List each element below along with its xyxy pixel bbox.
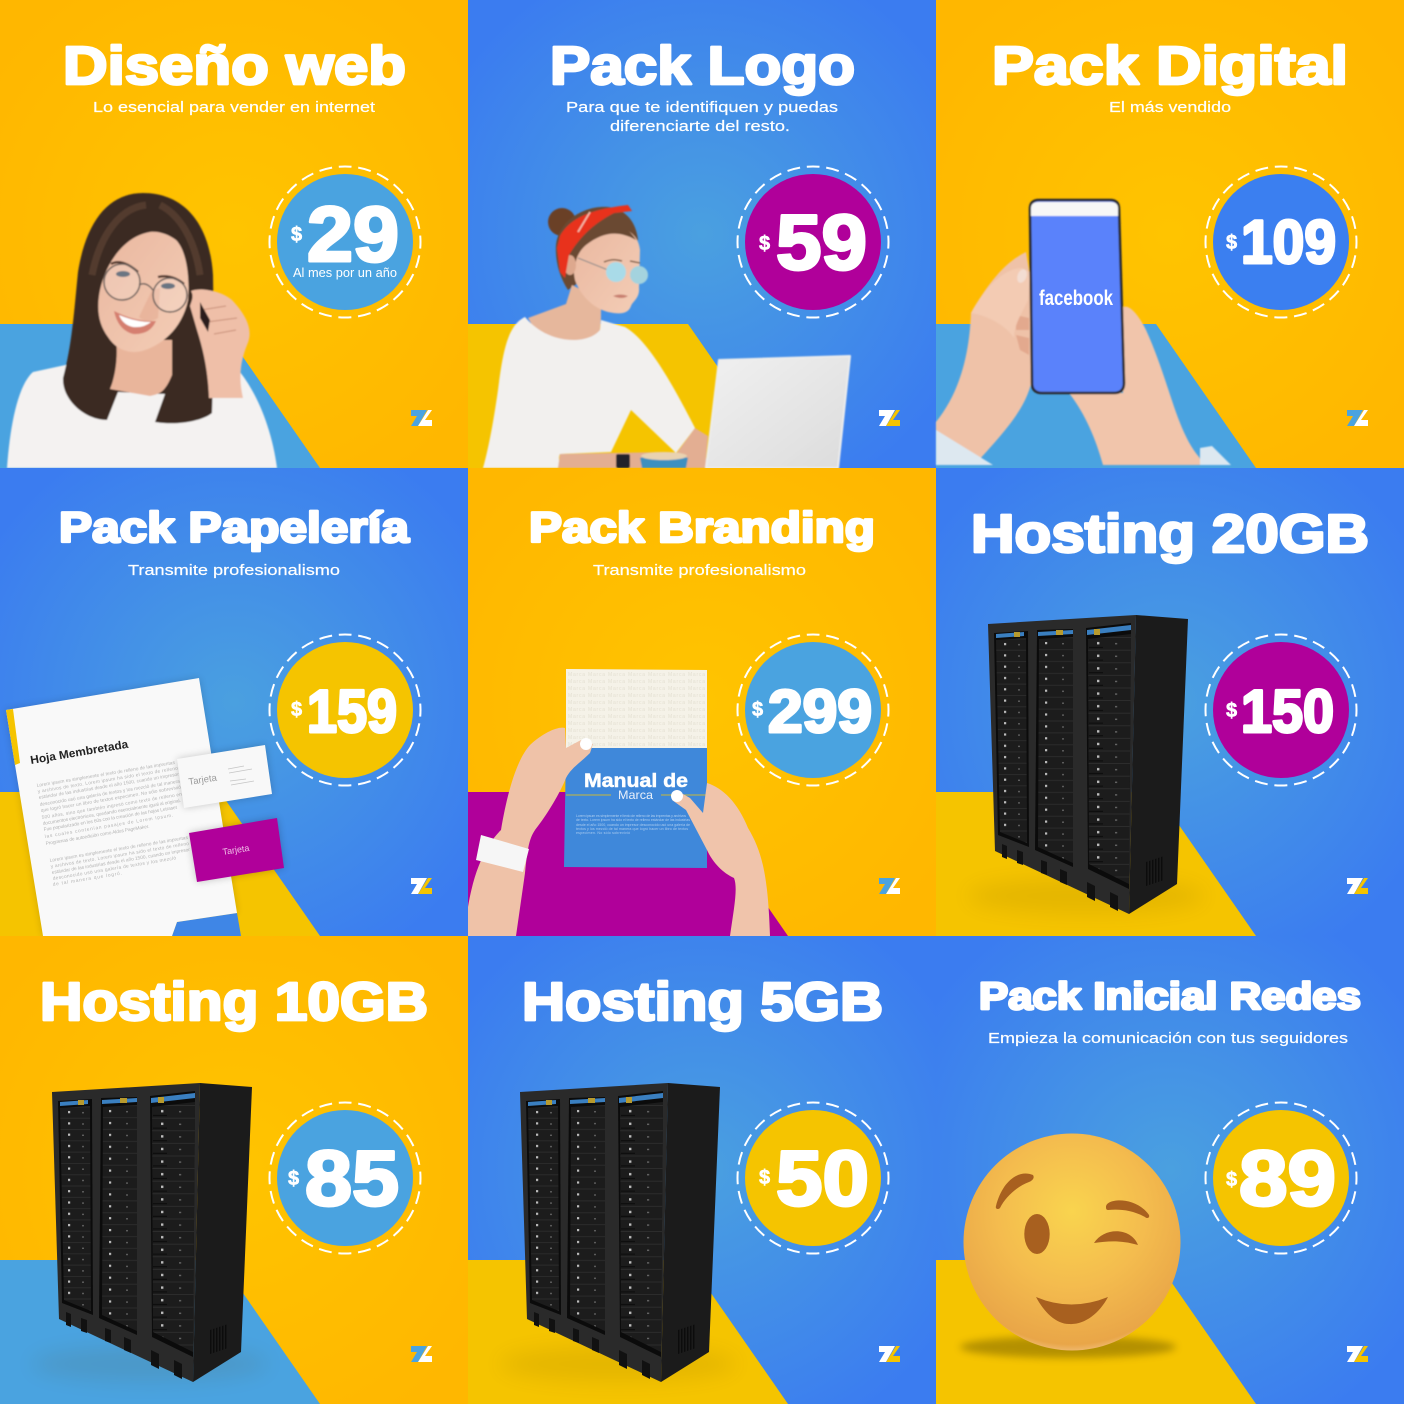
price badge: $ bbox=[291, 224, 302, 246]
business card: white bbox=[177, 745, 272, 808]
price badge: $ bbox=[759, 1167, 770, 1189]
server rack bbox=[500, 1083, 736, 1382]
price badge: $ bbox=[1226, 232, 1237, 254]
pattern text: Marca Marca Marca Marca Marca Marca Marca bbox=[568, 700, 705, 706]
price badge: 59 bbox=[776, 198, 867, 286]
panel: Pack Branding bbox=[468, 468, 936, 936]
document body text: las cuales contenían pasajes de Lorem Ipsum. bbox=[44, 813, 174, 840]
business card: magenta bbox=[189, 818, 284, 882]
price badge: Al mes por un año bbox=[293, 266, 397, 280]
text: facebook: facebook bbox=[1039, 287, 1113, 310]
price badge: 89 bbox=[1239, 1134, 1336, 1222]
icon: winking emoji bbox=[960, 1134, 1180, 1358]
panel: Pack Inicial Redes bbox=[936, 936, 1404, 1404]
document body text: Fue popularizado en los 60s con la creación de las hojas Letraset bbox=[43, 805, 178, 833]
business card: white: Tarjeta bbox=[188, 773, 218, 788]
body text lines: Lorem ipsum es simplemente el texto de relleno de las imprentas y archivos bbox=[576, 814, 686, 818]
document body text: Lorem ipsum es simplemente el texto de relleno de las imprentas bbox=[49, 835, 189, 864]
price badge bbox=[270, 166, 420, 318]
document body text: y archivos de texto. Lorem ipsum ha sido el texto de relleno bbox=[37, 766, 179, 795]
document body text bbox=[36, 760, 191, 888]
price badge: 299 bbox=[768, 678, 872, 745]
price badge: 50 bbox=[776, 1134, 869, 1222]
subtitle bbox=[566, 99, 838, 135]
icon: logo bbox=[879, 878, 900, 894]
icon: logo bbox=[411, 410, 432, 426]
subtitle: El más vendido bbox=[1109, 99, 1231, 116]
icon: logo bbox=[411, 878, 432, 894]
heading: Pack Digital bbox=[992, 36, 1348, 96]
price badge bbox=[738, 634, 888, 786]
business card: magenta: Tarjeta bbox=[222, 843, 250, 857]
price badge bbox=[270, 634, 420, 786]
photo: woman with red bandana at laptop bbox=[483, 205, 850, 468]
brand manual: Marca bbox=[618, 788, 653, 802]
document body text: desconocido usó una galería de textos y los mezcló bbox=[52, 855, 177, 882]
pattern text: Marca Marca Marca Marca Marca Marca Marca bbox=[568, 707, 705, 713]
heading: Hosting 20GB bbox=[971, 504, 1369, 564]
panel: Hosting 20GB bbox=[936, 468, 1404, 936]
pattern text: Marca Marca Marca Marca Marca Marca Marca bbox=[568, 672, 705, 678]
icon: logo bbox=[1347, 878, 1368, 894]
price badge: 85 bbox=[305, 1134, 399, 1222]
price badge: $ bbox=[759, 233, 770, 255]
photo: left arm with watch bbox=[468, 728, 593, 936]
price badge: $ bbox=[1226, 1169, 1237, 1191]
panel: Pack Papelería bbox=[0, 468, 468, 936]
price badge: 150 bbox=[1241, 678, 1334, 745]
icon: logo bbox=[1347, 410, 1368, 426]
server rack bbox=[32, 1083, 268, 1382]
icon: logo bbox=[411, 1346, 432, 1362]
heading: Hosting 10GB bbox=[40, 972, 428, 1032]
heading: Pack Inicial Redes bbox=[979, 976, 1361, 1018]
heading: Pack Logo bbox=[550, 36, 855, 96]
pattern text: Marca Marca Marca Marca Marca Marca Marca bbox=[568, 721, 705, 727]
pattern text: Marca Marca Marca Marca Marca Marca Marca bbox=[568, 686, 705, 692]
panel: Pack Logo bbox=[468, 0, 936, 468]
heading: Pack Papelería bbox=[59, 504, 410, 552]
pattern text: Marca Marca Marca Marca Marca Marca Marca bbox=[568, 693, 705, 699]
price badge bbox=[738, 166, 888, 318]
document body text: Programas de autoedición como Aldus PageMaker. bbox=[45, 824, 150, 847]
document body text: desconocido usó una galería de textos y los mezcló de tal manera bbox=[39, 779, 181, 808]
panel: Hosting 5GB bbox=[468, 936, 936, 1404]
pattern text: Marca Marca Marca Marca Marca Marca Marca bbox=[568, 679, 705, 685]
heading: Pack Branding bbox=[529, 504, 875, 552]
price badge: $ bbox=[752, 699, 763, 721]
price badge bbox=[270, 1102, 420, 1254]
price badge: 109 bbox=[1241, 208, 1336, 276]
heading: Diseño web bbox=[63, 36, 406, 96]
document body text: estándar de las industrias desde el año 1500, cuando un impresor bbox=[38, 772, 180, 801]
subtitle: Lo esencial para vender en internet bbox=[93, 99, 376, 116]
panel: Hosting 10GB bbox=[0, 936, 468, 1404]
price badge: $ bbox=[291, 699, 302, 721]
price badge bbox=[738, 1102, 888, 1254]
heading: Hosting 5GB bbox=[522, 972, 883, 1032]
icon: logo bbox=[879, 410, 900, 426]
pattern text: Marca Marca Marca Marca Marca Marca Marca bbox=[568, 714, 705, 720]
subtitle: Transmite profesionalismo bbox=[128, 562, 340, 579]
document heading: Hoja Membretada bbox=[30, 739, 130, 767]
document body text: que logró hacer un libro de textos especimen. No sólo sobrevivió bbox=[40, 785, 182, 814]
pattern text: Marca Marca Marca Marca Marca Marca Marca bbox=[568, 728, 705, 734]
body text lines: de texto. Lorem ipsum ha sido el texto de relleno estándar de las industrias bbox=[576, 818, 690, 822]
document body text: documentos electrónicos, quedando esencialmente igual al original. bbox=[42, 798, 181, 827]
body text lines bbox=[576, 814, 690, 835]
server rack bbox=[968, 615, 1204, 914]
photo: right hand bbox=[671, 783, 770, 936]
document body text: estándar de las industrias desde el año 1500, cuando un impresor bbox=[51, 847, 191, 876]
price badge: $ bbox=[288, 1168, 299, 1190]
document body text: de tal manera que logró. bbox=[52, 871, 122, 888]
price badge bbox=[1206, 1102, 1356, 1254]
document body text: y archivos de texto. Lorem ipsum ha sido el texto de relleno bbox=[50, 841, 190, 870]
price badge bbox=[1206, 634, 1356, 786]
photo: hands holding phone bbox=[936, 200, 1231, 465]
subtitle: Para que te identifiquen y puedas bbox=[566, 99, 838, 116]
body text lines: desde el año 1500, cuando un impresor desconocido usó una galería de bbox=[576, 823, 690, 827]
panel: Pack Digital bbox=[936, 0, 1404, 468]
pattern text: Marca Marca Marca Marca Marca Marca Marca bbox=[568, 742, 705, 748]
icon: logo bbox=[879, 1346, 900, 1362]
panel: Diseño web bbox=[0, 0, 468, 468]
pattern text: Marca Marca Marca Marca Marca Marca Marca bbox=[568, 735, 705, 741]
price badge bbox=[1206, 166, 1356, 318]
body text lines: textos y los mezcló de tal manera que logró hacer un libro de textos bbox=[576, 827, 688, 831]
letterhead sheet bbox=[6, 678, 241, 936]
subtitle: Empieza la comunicación con tus seguidores bbox=[988, 1030, 1348, 1047]
icon: logo bbox=[1347, 1346, 1368, 1362]
brand manual: Manual de bbox=[584, 771, 688, 792]
price badge: 29 bbox=[307, 190, 399, 278]
price badge: $ bbox=[1226, 700, 1237, 722]
subtitle: diferenciarte del resto. bbox=[610, 118, 790, 135]
document body text: Lorem ipsum es simplemente el texto de relleno de las imprentas bbox=[36, 760, 176, 789]
document body text: 500 años, sino que también ingresó como texto de relleno en bbox=[41, 792, 183, 821]
photo: smiling woman with glasses bbox=[7, 193, 277, 468]
brand manual bbox=[564, 669, 707, 868]
subtitle: Transmite profesionalismo bbox=[593, 562, 806, 579]
body text lines: especimen. No sólo sobrevivió bbox=[576, 831, 630, 835]
pattern text bbox=[568, 672, 705, 748]
price badge: 159 bbox=[307, 678, 397, 745]
